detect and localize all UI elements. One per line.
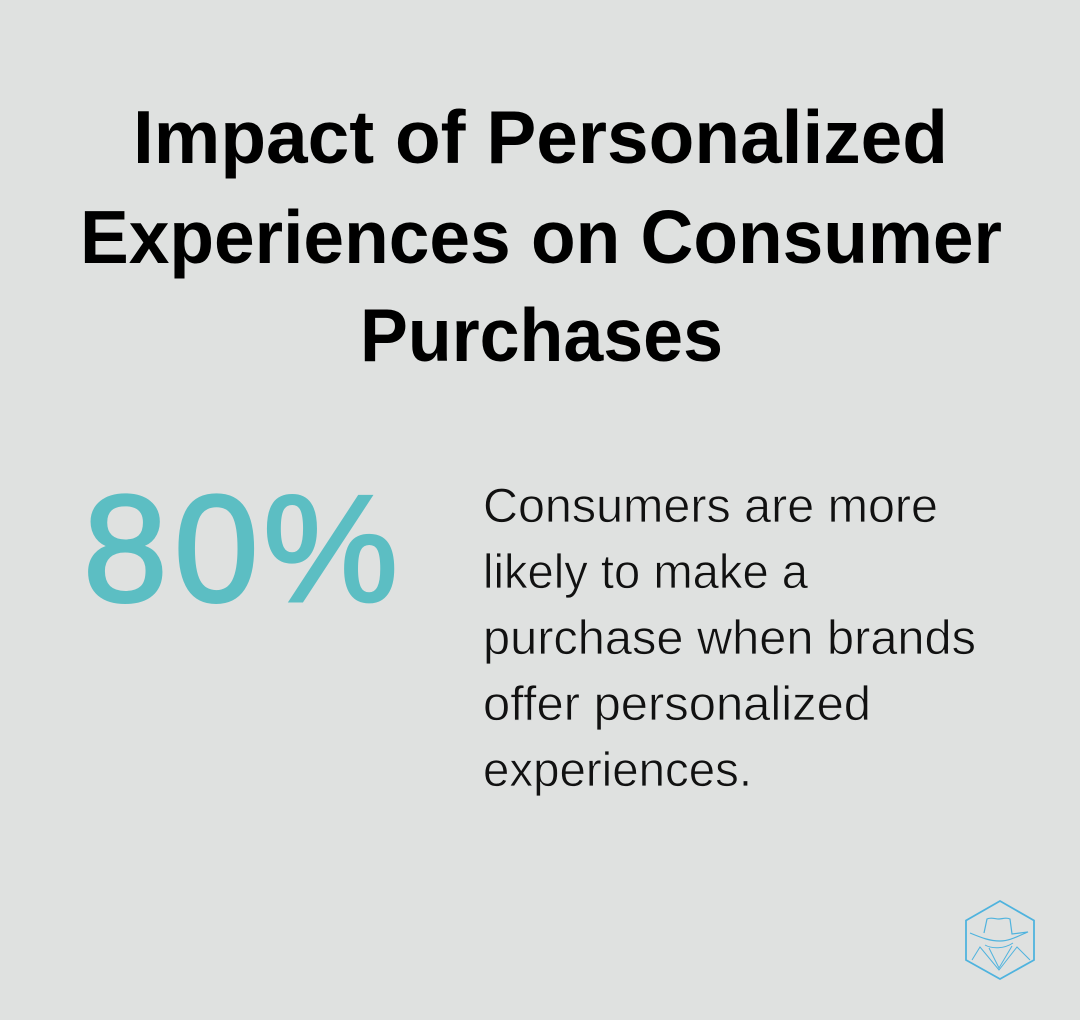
title: Experiences on Consumer [80, 195, 1002, 279]
description text: offer personalized [483, 678, 871, 731]
description text: Consumers are more [483, 480, 938, 533]
title [80, 95, 1002, 377]
description text: experiences. [483, 744, 752, 797]
description text [483, 480, 976, 797]
hat brim shadow [985, 943, 1013, 948]
title: Impact of Personalized [133, 95, 948, 179]
description text: likely to make a [483, 546, 808, 599]
description text: purchase when brands [483, 612, 976, 665]
statistic: 80%: 80% [83, 464, 398, 634]
icon: hexagon logo with hat and coat [966, 901, 1034, 979]
coat lapels [972, 946, 1030, 970]
title: Purchases [360, 293, 723, 377]
hat [970, 918, 1028, 941]
hexagon outline [966, 901, 1034, 979]
